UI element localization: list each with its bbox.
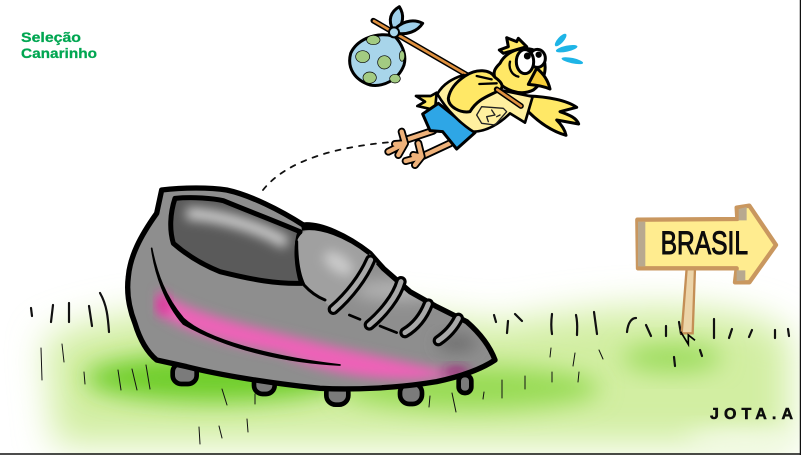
boot tongue — [297, 228, 377, 307]
head — [494, 38, 550, 93]
wing — [528, 96, 579, 135]
shirt logo — [477, 107, 507, 125]
title: Canarinho — [21, 45, 97, 61]
signature: JOTA.A — [710, 406, 793, 423]
stick — [373, 21, 473, 79]
grass tufts — [31, 293, 789, 444]
background: grass field — [45, 307, 801, 454]
football boot — [128, 188, 495, 405]
signpost — [637, 206, 776, 344]
small tail — [416, 93, 437, 110]
sweat drops — [553, 32, 584, 66]
sign board — [637, 206, 776, 282]
legs — [388, 131, 450, 165]
boot upper — [128, 188, 495, 389]
boot studs — [173, 363, 471, 405]
shirt — [437, 75, 533, 132]
bird with bundle — [350, 7, 584, 165]
bundle — [350, 7, 423, 85]
boot opening — [171, 198, 302, 283]
blue shorts — [423, 103, 475, 149]
boot pink stripe — [157, 280, 477, 380]
post grass — [681, 332, 695, 344]
arm — [448, 71, 502, 112]
stick end — [497, 89, 521, 106]
title — [21, 29, 97, 61]
title: Seleção — [21, 29, 81, 45]
boot sweep line — [152, 248, 340, 365]
post — [682, 268, 695, 333]
boot laces — [333, 260, 458, 341]
sign label: BRASIL — [661, 225, 748, 261]
dashed jump trajectory — [263, 142, 392, 190]
